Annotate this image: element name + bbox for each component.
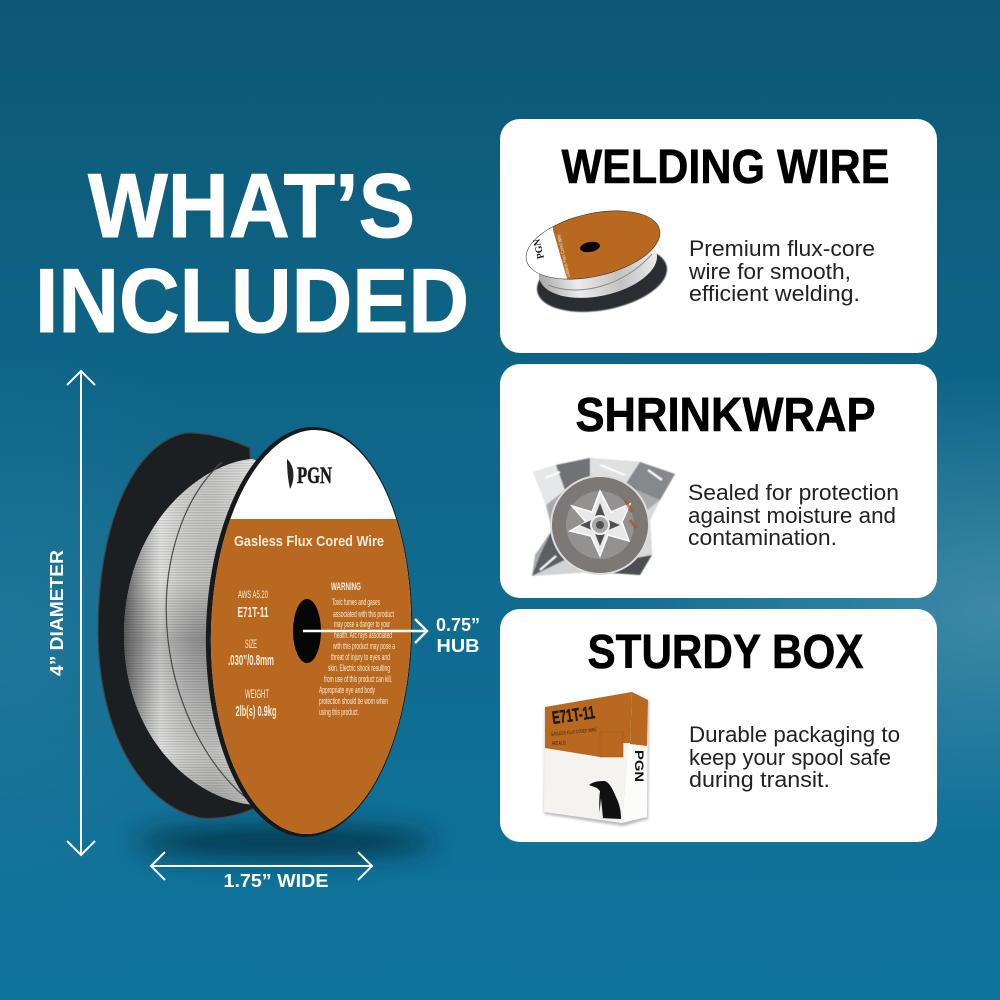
hub label [436, 615, 480, 656]
icon: box: E71T-11 [551, 702, 596, 728]
diameter label: 4” DIAMETER [47, 550, 67, 676]
warning text: with this product may pose a [332, 641, 395, 652]
penguin [589, 781, 621, 819]
warning text: health. Arc rays associated [334, 630, 392, 641]
warning text: using this product. [319, 707, 359, 718]
warning text: Toxic fumes and gases [332, 597, 380, 608]
title [35, 156, 469, 352]
specifications: WEIGHT [245, 687, 269, 701]
panel: sturdy box [500, 609, 937, 842]
icon: box: GASLESS FLUX CORED WIRE [551, 727, 597, 738]
height arrow [67, 371, 95, 855]
description: Premium flux-core [689, 236, 875, 261]
heading: STURDY BOX [588, 626, 864, 679]
warning text: skin. Electric shock resulting [328, 663, 390, 674]
heading: WELDING WIRE [562, 141, 890, 194]
spool shadow [135, 829, 435, 855]
front face rim [201, 424, 417, 840]
width label: 1.75” WIDE [224, 870, 328, 891]
description: Sealed for protection [688, 480, 899, 505]
title: INCLUDED [35, 251, 469, 352]
description: against moisture and [688, 503, 896, 528]
description: contamination. [688, 525, 837, 550]
icon: small spool: PGN [532, 237, 547, 260]
back flange [98, 433, 255, 818]
warning text: threat of injury to eyes and [331, 652, 390, 663]
foil wrap [532, 458, 675, 576]
hub hole [293, 599, 321, 663]
hub label: 0.75” [436, 615, 480, 635]
heading: SHRINKWRAP [576, 389, 876, 442]
hub arrow [303, 619, 427, 643]
description: Durable packaging to [689, 722, 900, 747]
warning text: protection should be worn when [319, 696, 388, 707]
warning text: WARNING [331, 581, 361, 593]
icon: box: AWS A5.20 [552, 741, 566, 747]
icon: small spool [526, 210, 668, 313]
icon: shrink-wrapped spool [532, 458, 675, 576]
product name: Gasless Flux Cored Wire [234, 533, 384, 550]
description: wire for smooth, [688, 259, 851, 284]
description [688, 236, 875, 306]
front face [210, 430, 412, 834]
warning text: from use of this product can kill. [324, 674, 392, 685]
wire drum [124, 459, 290, 805]
description: efficient welding. [689, 281, 860, 306]
specifications: AWS A5.20 [238, 589, 268, 601]
warning text [319, 581, 395, 718]
hub label: HUB [436, 636, 480, 656]
specifications: .030”/0.8mm [228, 652, 274, 669]
chrome star hub [570, 491, 630, 556]
warning text: Appropriate eye and body [319, 685, 375, 696]
PGN logo: PGN [297, 463, 332, 488]
icon: box: PGN [632, 750, 646, 782]
specifications: SIZE [245, 637, 257, 651]
icon: box [544, 692, 649, 826]
description: during transit. [689, 767, 830, 792]
main wire spool: 2lb(s) 0.9kg [236, 703, 276, 720]
wrapped disc [551, 476, 649, 574]
warning text: may pose a danger to your [334, 619, 390, 630]
PGN logo [287, 459, 332, 489]
panel: shrinkwrap [500, 364, 937, 598]
title: WHAT’S [88, 156, 415, 257]
main wire spool [98, 420, 420, 840]
width arrow [151, 852, 372, 880]
description [688, 480, 899, 550]
description [689, 722, 900, 792]
panel: welding wire [500, 119, 937, 353]
specifications: E71T-11 [238, 604, 268, 621]
specifications [228, 589, 276, 720]
description: keep your spool safe [689, 745, 891, 770]
icon: small spool: Gasless Flux Cored Wire [556, 234, 572, 278]
warning text: associated with this product [333, 609, 394, 620]
